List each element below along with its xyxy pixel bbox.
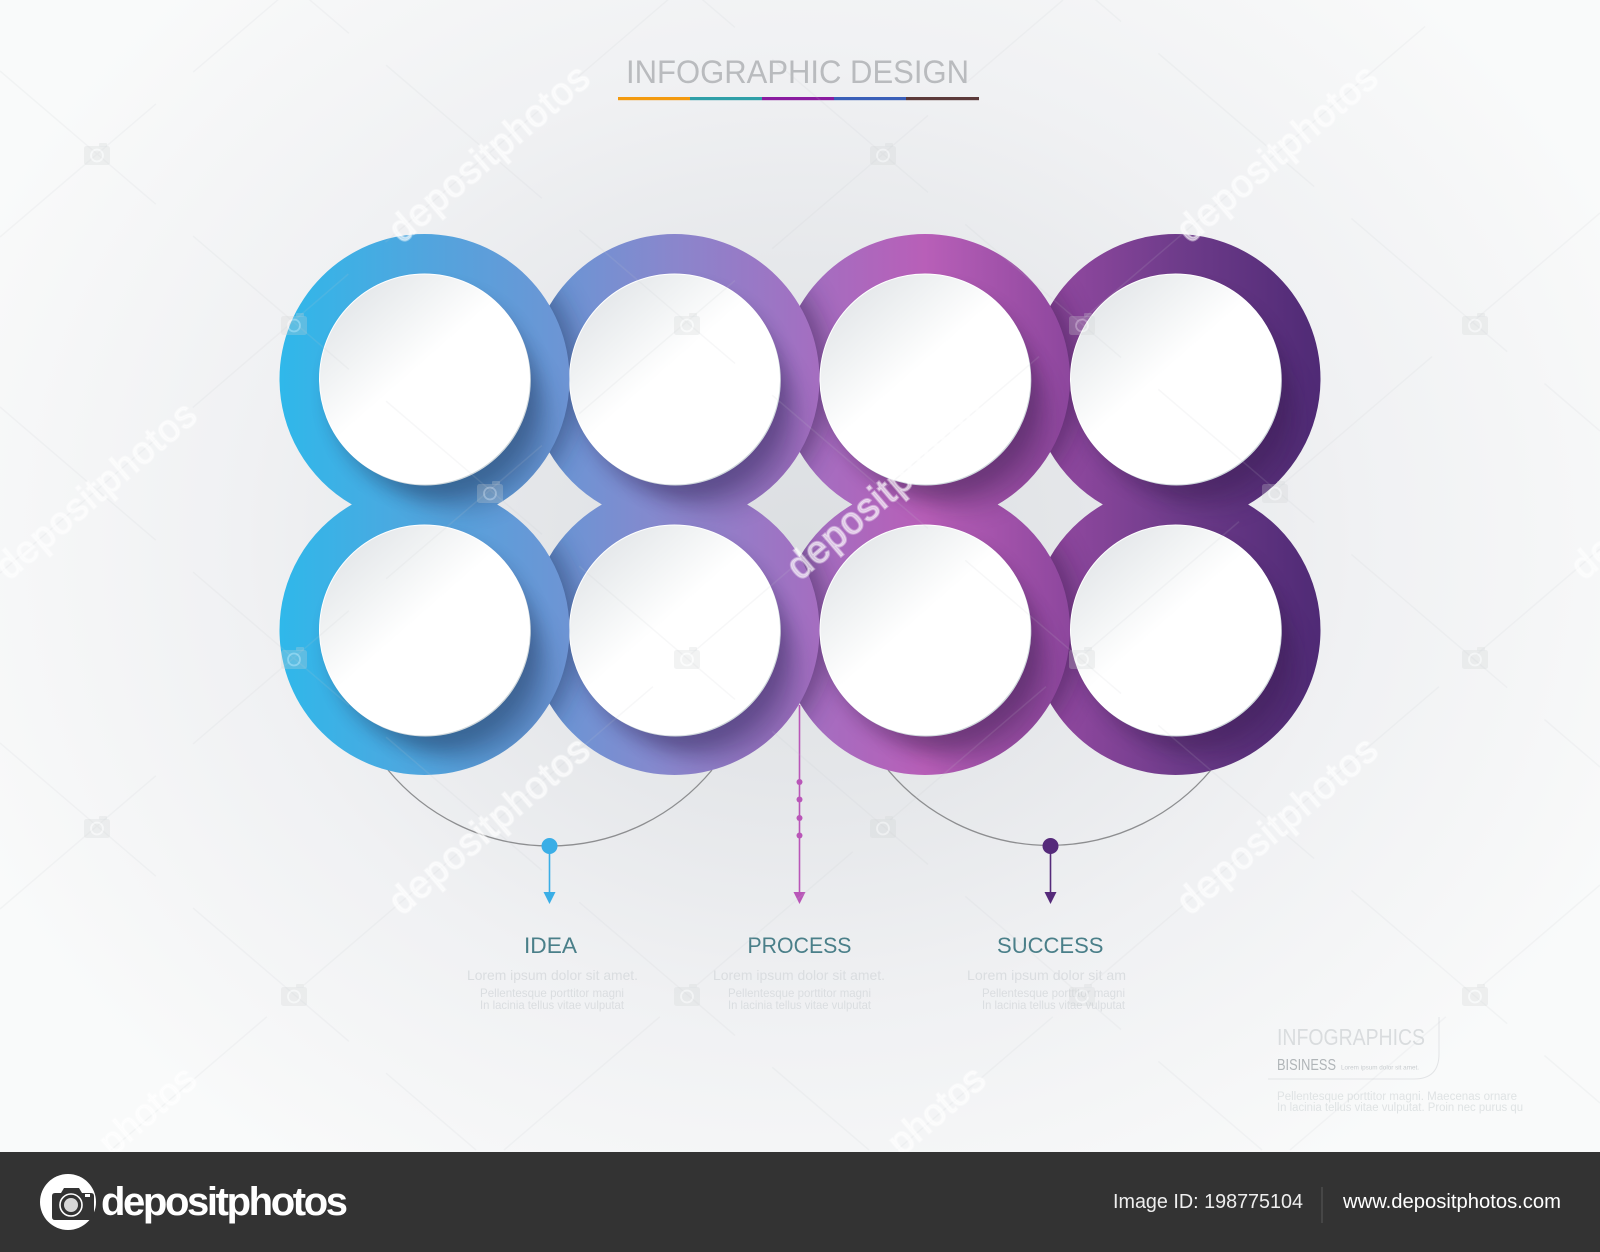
footer website: www.depositphotos.com bbox=[1342, 1191, 1561, 1213]
branding block: bottom right: INFOGRAPHICS bbox=[1277, 1024, 1425, 1050]
arrow: process bbox=[794, 705, 806, 904]
arrow: idea bbox=[542, 838, 558, 904]
connector arc: right bbox=[888, 770, 1211, 845]
label: idea bbox=[467, 933, 638, 1012]
watermark text: depositphotos bbox=[381, 57, 598, 251]
watermark text: depositphotos bbox=[1169, 57, 1386, 251]
label: idea: Pellentesque porttitor magni bbox=[480, 986, 624, 1000]
branding block: bottom right bbox=[1268, 1017, 1523, 1114]
footer bar bbox=[0, 1152, 1600, 1252]
connector arc: left bbox=[388, 770, 712, 846]
label: success: Lorem ipsum dolor sit am bbox=[967, 967, 1126, 983]
title underline: five colour bar bbox=[618, 97, 979, 100]
label: idea: In lacinia tellus vitae vulputat bbox=[480, 998, 625, 1012]
label: success: SUCCESS bbox=[997, 933, 1104, 958]
branding block: bottom right: Lorem ipsum dolor sit amet. bbox=[1341, 1066, 1419, 1072]
footer image id: Image ID: 198775104 bbox=[1113, 1191, 1303, 1213]
ring column 1 bbox=[280, 234, 570, 775]
label: process: Lorem ipsum dolor sit amet. bbox=[713, 967, 885, 983]
arrow: success bbox=[1042, 838, 1058, 904]
ring column 4 bbox=[1050, 234, 1320, 775]
footer divider bbox=[1322, 1187, 1323, 1223]
label: process: Pellentesque porttitor magni bbox=[728, 986, 871, 1000]
footer logo wordmark: depositphotos bbox=[101, 1180, 348, 1224]
branding block: bottom right: Pellentesque porttitor magni. Maecenas ornare bbox=[1277, 1091, 1517, 1103]
label: process: In lacinia tellus vitae vulputat bbox=[728, 998, 872, 1012]
branding block: bottom right: BISINESS bbox=[1277, 1057, 1336, 1074]
watermark text: depositphotos bbox=[1169, 729, 1386, 923]
watermark text: photos bbox=[91, 1058, 205, 1164]
label: success: In lacinia tellus vitae vulputat bbox=[982, 998, 1126, 1012]
watermark camera icons bbox=[84, 143, 1488, 1006]
label: idea: Lorem ipsum dolor sit amet. bbox=[467, 967, 638, 983]
watermark text: photos bbox=[880, 1058, 994, 1164]
watermark text: depositphotos bbox=[779, 394, 996, 588]
label: success bbox=[967, 933, 1126, 1012]
watermark text: depositphotos bbox=[381, 729, 598, 923]
label: process: PROCESS bbox=[748, 933, 852, 958]
label: process bbox=[713, 933, 885, 1012]
label: success: Pellentesque porttitor magni bbox=[982, 986, 1125, 1000]
label: idea: IDEA bbox=[524, 933, 577, 958]
title: INFOGRAPHIC DESIGN: INFOGRAPHIC DESIGN bbox=[626, 54, 969, 90]
ring column 2 bbox=[550, 234, 820, 775]
branding block: bottom right: In lacinia tellus vitae vulputat. Proin nec purus qu bbox=[1277, 1102, 1523, 1114]
ring column 3 bbox=[800, 234, 1070, 775]
footer logo icon: camera in circle bbox=[40, 1174, 96, 1230]
